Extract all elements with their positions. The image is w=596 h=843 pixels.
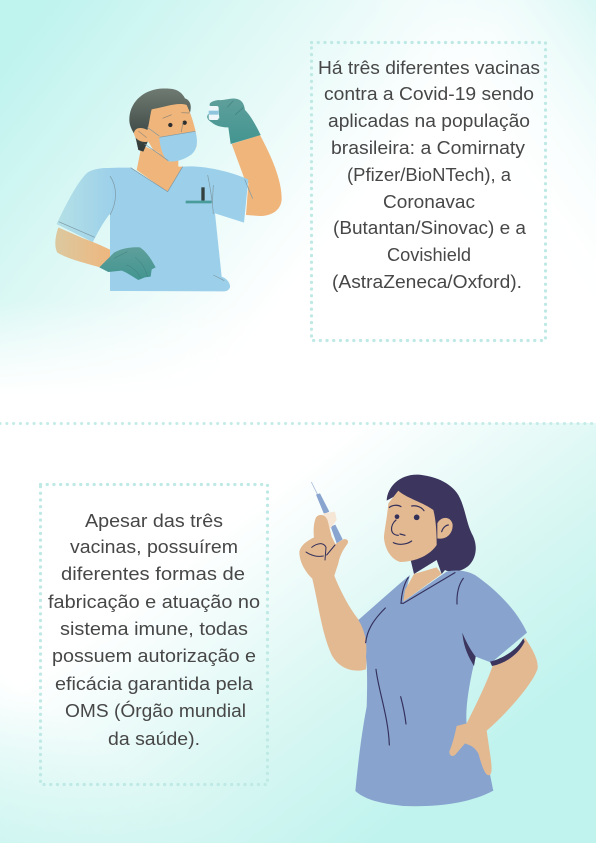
scrub top [355,571,527,806]
raised arm [312,575,368,671]
face [384,491,437,562]
paragraph: sistema imune, todas [60,619,248,639]
dotted frame [312,42,546,340]
left sleeve shading [57,168,114,242]
arm on hip [449,637,538,775]
illustration: nurse with syringe [299,475,538,806]
paragraph: Covishield [387,245,471,265]
paragraph: Coronavac [383,192,475,212]
paragraph: da saúde). [108,729,200,749]
paragraph: (Pfizer/BioNTech), a [347,165,512,185]
left arm [55,227,115,267]
paragraph [48,511,260,749]
background: top section [0,0,596,423]
paragraph: vacinas, possuírem [70,537,238,557]
collar, sleeve and fold lines [59,167,253,281]
scrub fold lines [366,573,463,745]
text box: three vaccines [312,42,546,340]
collar opening [403,567,442,602]
paragraph: Há três diferentes vacinas [318,58,540,78]
paragraph: eficácia garantida pela [55,674,254,694]
paragraph: Apesar das três [85,511,223,531]
raised glove and vial [207,99,261,144]
sleeve band [490,638,525,666]
paragraph: brasileira: a Comirnaty [331,138,525,158]
dotted frame [40,484,268,784]
background: bottom section [0,423,596,843]
text box: WHO authorization [40,484,268,784]
paragraph: (Butantan/Sinovac) e a [333,218,527,238]
paragraph: fabricação e atuação no [48,592,260,612]
paragraph [318,58,540,292]
facial features [389,505,448,544]
underarm shadow [462,633,476,666]
paragraph: aplicadas na população [328,111,530,131]
eyes [395,514,419,520]
long hair [387,475,476,574]
eyes and brows [163,113,189,132]
paragraph: (AstraZeneca/Oxford). [332,272,522,292]
ear line [138,131,147,138]
face mask [145,127,197,162]
hand holding syringe [299,515,348,578]
paragraph: contra a Covid-19 sendo [324,84,534,104]
scrub top [57,166,248,291]
lower glove [99,247,156,280]
illustration: doctor with vaccine vial [55,88,282,291]
paragraph: diferentes formas de [61,564,245,584]
ear [437,518,453,539]
paragraph: OMS (Órgão mundial [65,700,246,721]
pocket and pen [186,187,212,203]
section divider [0,422,596,425]
hair [129,88,191,152]
paragraph: possuem autorização e [52,646,256,666]
syringe [311,482,343,543]
face [134,104,197,160]
right arm [232,135,282,216]
neck [137,145,183,193]
